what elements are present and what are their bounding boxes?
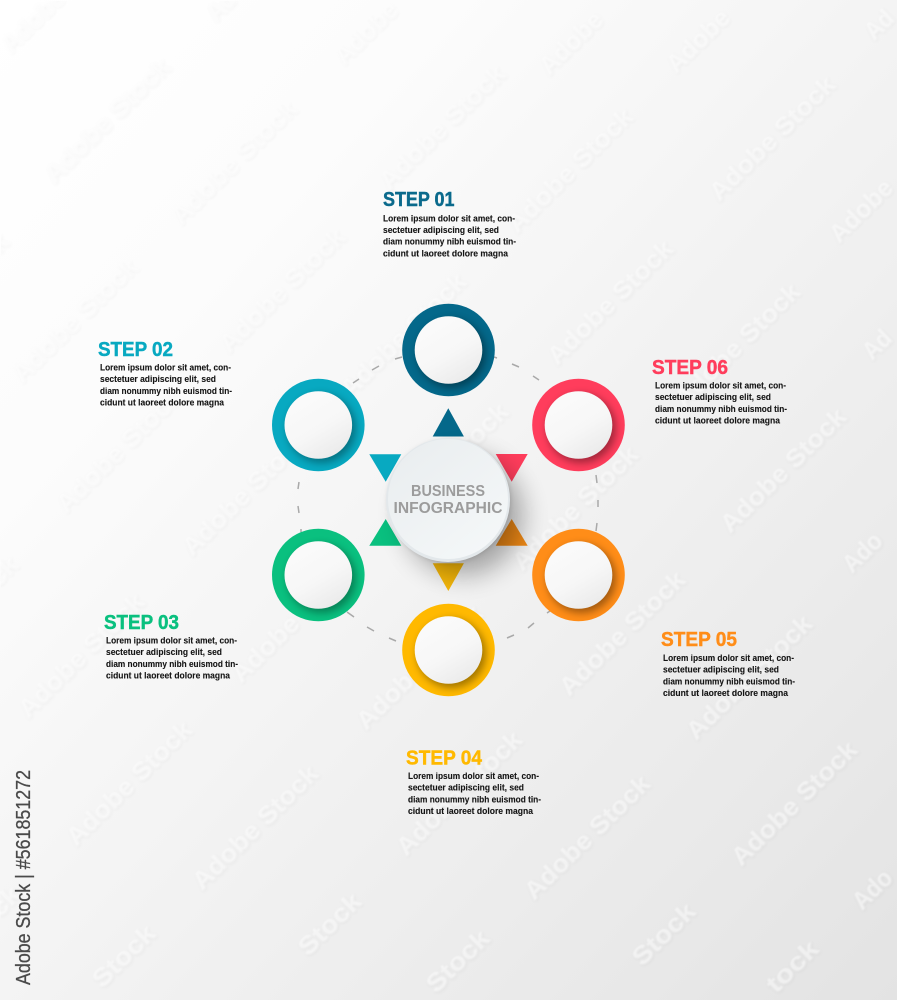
text block: step 04: STEP 04	[406, 748, 483, 770]
watermark pattern: Adobe Stock	[519, 770, 656, 905]
triangle: step 06	[496, 454, 528, 482]
watermark pattern: Adobe Stock	[704, 71, 841, 206]
watermark pattern: Adobe Stock	[187, 760, 324, 895]
text block: step 02: STEP 02	[98, 339, 173, 361]
triangle: step 01	[433, 408, 464, 436]
text block: step 02: cidunt ut laoreet dolore magna	[100, 398, 225, 408]
watermark pattern: Adobe Stock	[177, 426, 314, 561]
text block: step 01: diam nonummy nibh euismod tin-	[383, 237, 516, 248]
circle: step 02	[272, 379, 365, 471]
text block: step 02	[98, 339, 232, 408]
text block: step 06: sectetuer adipiscing elit, sed	[655, 392, 771, 403]
circle: step 01	[402, 304, 495, 396]
text block: step 02: diam nonummy nibh euismod tin-	[100, 386, 232, 397]
triangle: step 04	[433, 563, 464, 591]
stock credit: Adobe Stock | #561851272	[13, 770, 35, 985]
watermark pattern: Ado	[837, 527, 888, 578]
watermark pattern: Stock	[87, 919, 161, 993]
text block: step 02: Lorem ipsum dolor sit amet, con-	[100, 362, 231, 374]
watermark pattern: Adobe Stock	[377, 398, 514, 533]
triangle: step 02	[369, 454, 401, 482]
text block: step 06: STEP 06	[652, 357, 728, 379]
watermark pattern: Adobe Stock	[39, 53, 176, 188]
text block: step 01: cidunt ut laoreet dolore magna	[383, 248, 509, 259]
text block: step 05: cidunt ut laoreet dolore magna	[663, 688, 789, 699]
triangle: step 03	[369, 519, 401, 546]
text block: step 04: Lorem ipsum dolor sit amet, con-	[408, 771, 539, 782]
watermark pattern: Adobe Stock	[726, 736, 863, 871]
text block: step 04: sectetuer adipiscing elit, sed	[408, 783, 524, 794]
watermark pattern: Adobe	[534, 6, 609, 80]
watermark pattern: Adobe	[824, 174, 897, 248]
watermark pattern: Adobe Stock	[542, 235, 679, 370]
watermark pattern: Adobe Stock	[335, 268, 472, 403]
text block: step 05: sectetuer adipiscing elit, sed	[663, 665, 779, 676]
text block: step 05: diam nonummy nibh euismod tin-	[663, 676, 795, 687]
circle: step 06	[532, 379, 625, 471]
text block: step 03: diam nonummy nibh euismod tin-	[106, 659, 238, 670]
text block: step 03: cidunt ut laoreet dolore magna	[106, 670, 231, 682]
text block: step 04: cidunt ut laoreet dolore magna	[408, 806, 534, 817]
text block: step 03: sectetuer adipiscing elit, sed	[106, 647, 222, 658]
center hub	[386, 438, 523, 575]
watermark pattern: Adobe Stock	[554, 566, 691, 701]
text block: step 03: Lorem ipsum dolor sit amet, con-	[106, 636, 237, 646]
watermark pattern: Adobe Stock	[214, 223, 351, 358]
text block: step 03	[104, 612, 238, 682]
text block: step 06: diam nonummy nibh euismod tin-	[655, 404, 787, 415]
text block: step 01: sectetuer adipiscing elit, sed	[383, 225, 499, 236]
watermark pattern: Stock	[627, 897, 701, 971]
circle: step 04	[402, 604, 495, 696]
circle: step 05	[532, 529, 625, 621]
text block: step 05: STEP 05	[661, 629, 737, 651]
watermark pattern: tock	[761, 935, 825, 998]
text block: step 04: diam nonummy nibh euismod tin-	[408, 794, 541, 805]
watermark pattern: Adobe	[661, 4, 736, 78]
watermark pattern: Adobe Stock	[715, 403, 852, 538]
watermark pattern: Adobe Stock	[374, 60, 511, 195]
text block: step 01: Lorem ipsum dolor sit amet, con-	[383, 213, 515, 224]
triangle: step 05	[496, 519, 528, 546]
watermark pattern: Adobe Stock	[681, 610, 818, 745]
text block: step 01	[383, 189, 516, 259]
watermark pattern: Adobe Stock	[391, 726, 528, 861]
text block: step 05: Lorem ipsum dolor sit amet, con-	[663, 653, 794, 664]
center hub: BUSINESS	[411, 483, 485, 500]
circle: step 03	[272, 529, 365, 621]
watermark pattern: Adobe Stock	[61, 716, 198, 851]
text block: step 04	[406, 748, 541, 817]
watermark pattern: Adobe Stock	[226, 553, 363, 688]
text block: step 05	[661, 629, 795, 699]
watermark pattern: Adobe Stock	[166, 95, 303, 230]
watermark pattern: Adobe Stock	[51, 383, 188, 518]
dashed connector ring	[298, 357, 598, 641]
text block: step 06	[652, 357, 787, 426]
watermark pattern: Stock	[421, 924, 495, 998]
watermark pattern: Adobe Stock	[669, 278, 806, 413]
text block: step 03: STEP 03	[104, 612, 179, 634]
watermark pattern: Adobe Stock	[507, 441, 644, 576]
watermark pattern: Adobe Stock	[13, 588, 150, 723]
center hub: INFOGRAPHIC	[394, 500, 502, 517]
watermark pattern: Adobe Stock	[502, 103, 639, 238]
watermark pattern: Stock	[293, 887, 367, 961]
text block: step 01: STEP 01	[383, 189, 454, 211]
text block: step 02: sectetuer adipiscing elit, sed	[100, 374, 216, 385]
watermark pattern: Adobe Stock	[7, 253, 144, 388]
text block: step 06: cidunt ut laoreet dolore magna	[655, 416, 781, 426]
watermark pattern: Adobe Stock	[351, 600, 488, 735]
text block: step 06: Lorem ipsum dolor sit amet, con-	[655, 380, 786, 392]
